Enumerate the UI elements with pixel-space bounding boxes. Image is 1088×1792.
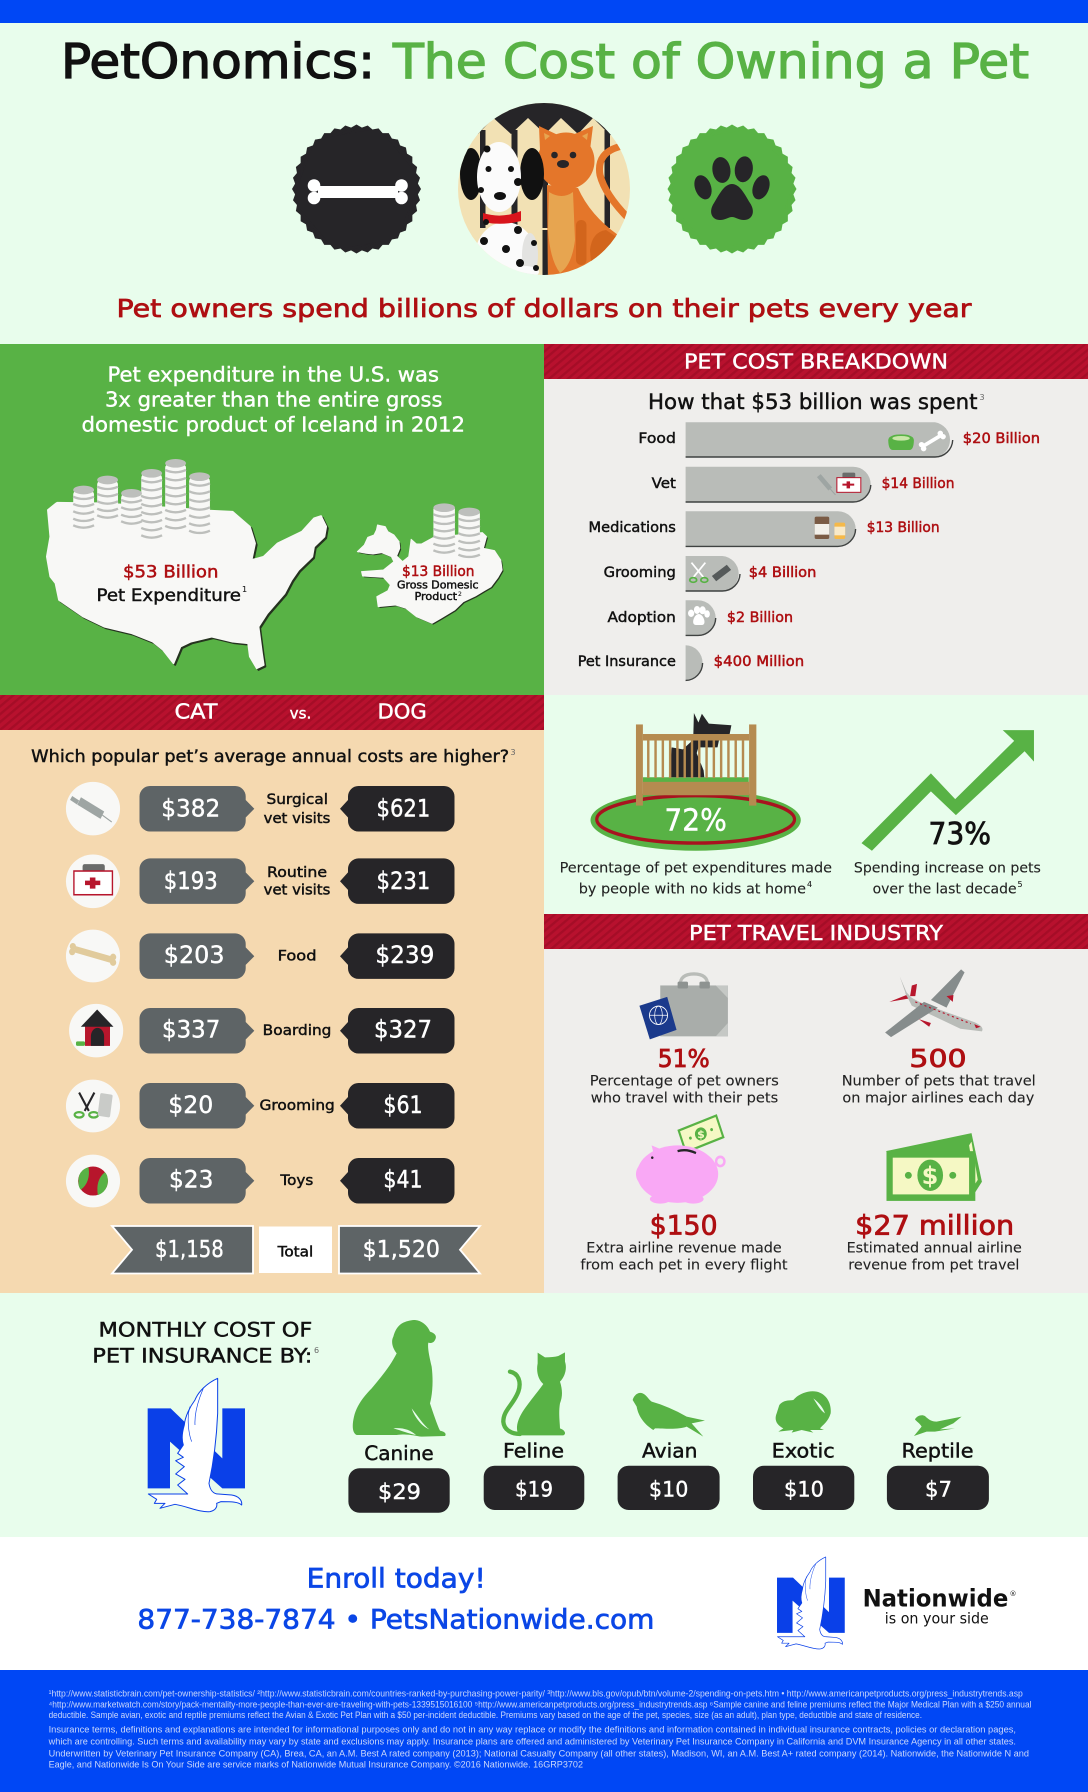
heading: cat vs dog: CAT [174, 700, 218, 724]
bar values: $20 Billion [963, 430, 1040, 447]
heading: Iceland comparison: 3x greater than the entire gross [105, 388, 442, 412]
stat: 150 dollars [580, 1211, 788, 1274]
stat: 150 dollars: $150 [650, 1211, 718, 1242]
price: exotic: Exotic [772, 1440, 835, 1463]
price: reptile [887, 1440, 989, 1510]
dog values: $231 [376, 867, 430, 895]
logo: Nationwide eagle [148, 1378, 245, 1512]
icon: dog in crib on rug [590, 713, 801, 851]
row icons [66, 782, 123, 1207]
label: Iceland GDP: Gross Domesic [397, 580, 479, 592]
price: exotic: $10 [784, 1478, 824, 1503]
caption: no kids at home: 4 [807, 880, 812, 889]
bar icons [688, 431, 946, 625]
totals ribbons [112, 1226, 480, 1274]
label: Iceland GDP: Product [414, 591, 457, 603]
icons: suitcase, plane, piggy bank, cash [636, 969, 982, 1204]
price: canine: Canine [364, 1442, 434, 1465]
cost category labels: vet visits [264, 883, 330, 899]
stat: 51 percent: who travel with their pets [591, 1090, 778, 1106]
price: reptile: $7 [925, 1478, 952, 1503]
label: US pet expenditure: 1 [242, 585, 247, 594]
heading: cat vs dog: vs. [290, 705, 311, 723]
price: avian: Avian [642, 1440, 697, 1463]
logo: Nationwide wordmark [863, 1585, 1016, 1627]
icon: exotic pet silhouette [776, 1391, 831, 1433]
dog values: $327 [374, 1016, 432, 1044]
price: canine [348, 1442, 450, 1513]
map: Iceland with coin stacks [357, 503, 503, 625]
logo: Nationwide wordmark: Nationwide [863, 1585, 1008, 1613]
stat: 500 pets: Number of pets that travel [842, 1073, 1036, 1089]
cost category labels: Food [278, 949, 316, 965]
icon: cat silhouette [503, 1352, 566, 1435]
bar values: $4 Billion [749, 564, 816, 581]
title: PetOnomics: [61, 34, 375, 90]
icon: suitcase and passport [639, 974, 728, 1039]
legal disclaimer: Insurance terms, definitions and explanations are intended for informational purposes only and do not in any way replace or modify the definitions and information contained in individual insurance contracts, policies or declaration pages, [49, 1725, 1016, 1735]
panel: footer sources and legal [0, 1670, 1088, 1792]
icon: stack of cash [886, 1133, 982, 1201]
cost category labels: Grooming [260, 1098, 335, 1114]
bar values: $400 Million [714, 653, 804, 670]
legal disclaimer: which are controlling. Such terms and availability may vary by state and exclusions may apply. Insurance plans are offered and administered by Veterinary Pet Insurance Company in California and DVM Insurance Agency in all other states. [48, 1737, 1016, 1747]
price: reptile: Reptile [902, 1440, 974, 1463]
price: exotic [753, 1440, 854, 1510]
icon: bird silhouette [633, 1393, 705, 1437]
stat: 500 pets: on major airlines each day [842, 1090, 1035, 1106]
legal disclaimer: Underwritten by Veterinary Pet Insurance Company (CA), Brea, CA, an A.M. Best A rated company (2013); National Casualty Company (all other states), Madison, WI, an A.M. Best A+ rated company (2014). Nationwide, the Nationwide N and [49, 1749, 1029, 1759]
icons: bird, exotic pet and reptile silhouettes [633, 1391, 962, 1437]
panel: households and spending stats [544, 695, 1088, 914]
stat: 27 million: Estimated annual airline [847, 1241, 1022, 1257]
bar labels: Food [638, 430, 676, 447]
top blue bar [0, 0, 1088, 23]
bar labels: Pet Insurance [578, 653, 676, 670]
title: The Cost of Owning a Pet [392, 34, 1029, 90]
icon: piggy bank [636, 1116, 724, 1204]
stat: 150 dollars: Extra airline revenue made [586, 1241, 782, 1257]
caption: no kids at home: Percentage of pet expenditures made [560, 860, 832, 876]
icon: reptile silhouette [914, 1415, 962, 1436]
cost category labels: Boarding [263, 1023, 331, 1039]
panel: pet cost breakdown [544, 344, 1088, 695]
dog values: $621 [376, 794, 430, 822]
stat: 27 million: $27 million [855, 1211, 1014, 1242]
text: phone and website: 877-738-7874 • PetsNationwide.com [137, 1604, 654, 1635]
logo: Nationwide eagle small [777, 1557, 845, 1649]
cat values [161, 794, 224, 1194]
cost category labels [260, 792, 335, 1189]
subheading: how that 53 billion was spent: How that $53 billion was spent [648, 390, 978, 414]
icon text: dollar signs: $ [922, 1162, 938, 1190]
legal disclaimer [48, 1725, 1029, 1770]
price: feline [484, 1440, 584, 1510]
stat: 72 percent: 72% [664, 804, 727, 838]
heading: pet cost breakdown: PET COST BREAKDOWN [684, 349, 948, 373]
heading: monthly cost: 6 [314, 1346, 319, 1355]
heading: monthly cost: MONTHLY COST OF [98, 1319, 312, 1342]
panel: Iceland comparison [0, 344, 544, 695]
logo: Nationwide wordmark: is on your side [885, 1609, 989, 1627]
icon: bone badge [271, 104, 442, 274]
stat: 500 pets: 500 [909, 1044, 967, 1073]
heading: Iceland comparison [82, 363, 465, 437]
cat cost pills [140, 786, 254, 1204]
label: US pet expenditure [96, 563, 247, 606]
subheading: how that 53 billion was spent: 3 [980, 393, 985, 402]
title [61, 34, 1029, 90]
cost category labels: Surgical [266, 792, 328, 808]
totals ribbons: $1,158 [155, 1237, 224, 1263]
footnote sources [49, 1689, 1032, 1720]
cost category labels: Routine [267, 865, 327, 881]
heading: monthly cost: PET INSURANCE BY: [92, 1345, 312, 1368]
bar chart: spending categories [578, 422, 1040, 681]
stat: 51 percent [590, 1044, 779, 1106]
arrow: rising spend [862, 730, 1034, 851]
price: avian [618, 1440, 720, 1510]
icons: dog and cat silhouettes [353, 1320, 566, 1437]
stat: 500 pets [842, 1044, 1036, 1106]
label: Iceland GDP [397, 564, 479, 603]
bar values: $13 Billion [867, 519, 940, 536]
bar values: $2 Billion [727, 609, 793, 626]
dog values: $239 [375, 941, 434, 969]
stat: 73 percent: 73% [928, 817, 991, 852]
footnote sources: ⁴http://www.marketwatch.com/story/pack-mentality-more-people-than-ever-are-traveling-with-pets-1339515016100 ⁵http://www.americanpetproducts.org/press_industrytrends.asp ⁶Sample canine and feline premiums reflect the Major Medical Plan with a $250 annual [49, 1699, 1032, 1709]
caption: spending increase: over the last decade [873, 882, 1017, 898]
caption: spending increase [854, 860, 1041, 898]
price: avian: $10 [649, 1478, 688, 1503]
heading: Iceland comparison: domestic product of Iceland in 2012 [82, 413, 465, 437]
cat values: $20 [168, 1091, 213, 1119]
icon text: dollar signs [697, 1128, 938, 1190]
heading: pet travel industry: PET TRAVEL INDUSTRY [689, 921, 944, 945]
stat: 27 million: revenue from pet travel [848, 1258, 1019, 1274]
panel: cat vs dog [0, 695, 544, 1293]
bar values: $14 Billion [882, 475, 954, 492]
bar values [714, 430, 1040, 670]
label: US pet expenditure: $53 Billion [123, 563, 218, 582]
question: Which popular pet’s average annual costs are higher? [31, 747, 509, 767]
stat: 51 percent: 51% [658, 1044, 710, 1073]
question: 3 [510, 748, 516, 757]
map: United States with coin stacks [47, 459, 328, 670]
totals ribbons: $1,520 [363, 1237, 440, 1263]
dog cost pills [340, 786, 454, 1204]
label: Iceland GDP: 2 [458, 591, 462, 598]
bar labels: Adoption [608, 609, 676, 626]
dog values [374, 794, 434, 1194]
subtitle: Pet owners spend billions of dollars on their pets every year [116, 294, 972, 323]
heading: monthly cost [92, 1319, 319, 1368]
cat values: $382 [161, 794, 220, 822]
cat values: $23 [169, 1166, 213, 1194]
dog values: $41 [383, 1166, 423, 1194]
icon: airplane [885, 969, 982, 1037]
bar labels: Vet [652, 475, 676, 492]
cat values: $203 [164, 941, 224, 969]
cat values: $337 [162, 1016, 220, 1044]
totals ribbons: Total [277, 1244, 313, 1260]
footnote sources: ¹http://www.statisticbrain.com/pet-ownership-statistics/ ²http://www.statisticbrain.com/countries-ranked-by-purchasing-power-parity/ ³http://www.bls.gov/opub/btn/volume-2/spending-on-pets.htm • http://www.americanpetproducts.org/press_industrytrends.asp [49, 1689, 1023, 1699]
bar labels: Medications [588, 519, 676, 536]
icon: dog silhouette [353, 1320, 446, 1437]
panel: pet travel industry [544, 914, 1088, 1293]
dog values: $61 [383, 1091, 423, 1119]
caption: spending increase: Spending increase on pets [854, 860, 1041, 876]
icon: paw badge [647, 104, 817, 274]
stat: 27 million [847, 1211, 1022, 1274]
cost category labels: Toys [279, 1173, 313, 1189]
illustration: dog and cat by fence [458, 103, 630, 275]
panel: monthly cost of pet insurance [0, 1293, 1088, 1537]
icon text: dollar signs: $ [697, 1128, 705, 1141]
heading: cat vs dog [174, 700, 427, 724]
panel: call to action [0, 1537, 1088, 1670]
heading: cat vs dog: DOG [378, 700, 427, 724]
price: feline: Feline [503, 1440, 564, 1463]
cat values: $193 [164, 867, 218, 895]
legal disclaimer: Eagle, and Nationwide Is On Your Side are service marks of Nationwide Mutual Insurance Company. ©2016 Nationwide. 16GRP3702 [49, 1760, 583, 1770]
text: enroll today: Enroll today! [307, 1564, 486, 1595]
caption: no kids at home: by people with no kids at home [579, 882, 806, 898]
footnote sources: deductible. Sample avian, exotic and reptile premiums reflect the Avian & Exotic Pet Plan with a $50 per-incident deductible. Premiums vary based on the age of the pet, species, size (as an adult), plan type, deductible and state of residence. [49, 1710, 922, 1720]
label: Iceland GDP: $13 Billion [402, 564, 474, 580]
caption: spending increase: 5 [1018, 880, 1023, 889]
cost category labels: vet visits [264, 811, 330, 827]
bar labels: Grooming [604, 564, 676, 581]
heading: Iceland comparison: Pet expenditure in the U.S. was [108, 363, 439, 387]
stat: 51 percent: Percentage of pet owners [590, 1073, 779, 1089]
bar labels [578, 430, 676, 670]
label: US pet expenditure: Pet Expenditure [96, 586, 241, 606]
caption: no kids at home [560, 860, 832, 898]
price: canine: $29 [378, 1480, 421, 1505]
stat: 150 dollars: from each pet in every flight [580, 1258, 788, 1274]
logo: Nationwide wordmark: ® [1010, 1590, 1016, 1598]
price: feline: $19 [515, 1478, 553, 1503]
